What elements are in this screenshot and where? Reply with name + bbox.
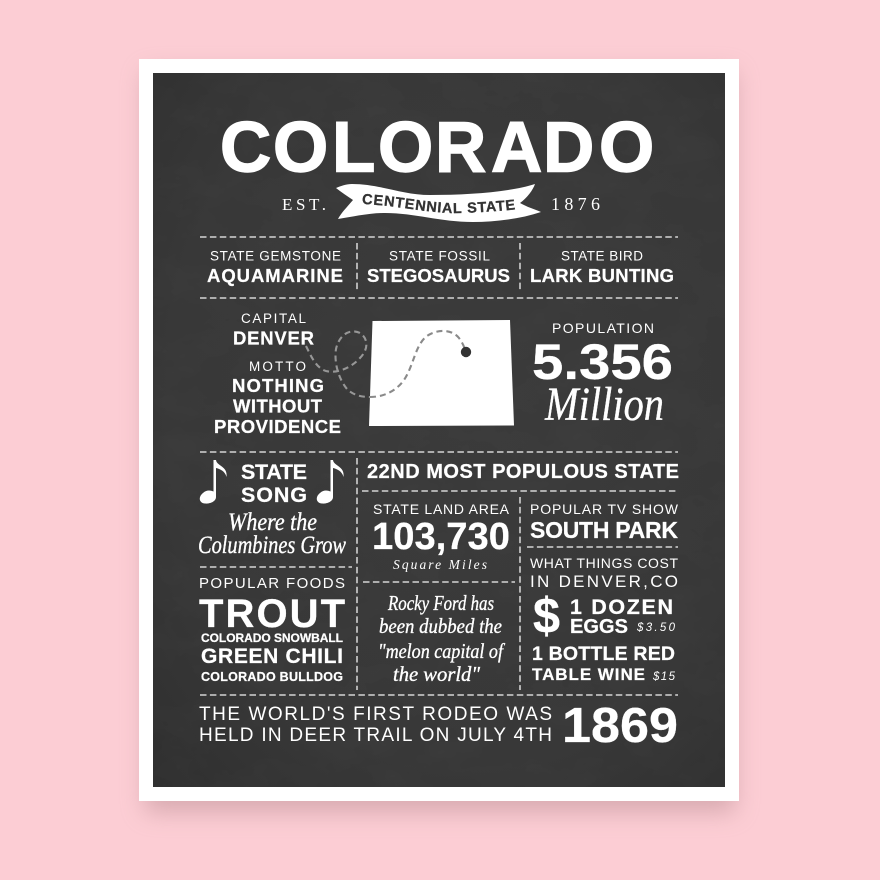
population <box>532 320 673 431</box>
wine item: TABLE WINE <box>532 665 645 684</box>
foods label: POPULAR FOODS <box>199 575 345 592</box>
title: COLORADO <box>220 108 654 188</box>
eggs item: $3.50 <box>636 622 676 634</box>
rodeo year: 1869 <box>562 699 678 753</box>
population label: POPULATION <box>552 320 654 336</box>
motto value: WITHOUT <box>233 396 323 416</box>
land area number: 103,730 <box>372 516 510 558</box>
song heading: STATE <box>241 460 307 484</box>
song title: Columbines Grow <box>198 532 346 559</box>
year: 1876 <box>551 194 600 214</box>
state facts row <box>207 248 674 286</box>
melon fact: been dubbed the <box>379 614 502 638</box>
state shape <box>369 320 514 426</box>
cost heading <box>530 555 678 591</box>
melon fact: the world" <box>393 662 480 686</box>
gemstone label: STATE GEMSTONE <box>210 248 341 264</box>
populous rank: 22ND MOST POPULOUS STATE <box>367 461 679 483</box>
poster white frame <box>139 59 739 801</box>
food: colorado snowball: COLORADO SNOWBALL <box>201 631 343 645</box>
melon fact: Rocky Ford has <box>387 591 494 615</box>
eggs item: EGGS <box>570 616 628 638</box>
wine item <box>532 643 676 684</box>
popular foods <box>199 575 345 684</box>
motto label: MOTTO <box>249 359 306 374</box>
chalkboard panel <box>153 73 725 787</box>
state song <box>198 460 346 559</box>
cost heading: WHAT THINGS COST <box>530 555 678 571</box>
dashed route inside state <box>370 331 465 397</box>
banner text: CENTENNIAL STATE <box>362 194 516 214</box>
rodeo text <box>199 704 552 746</box>
wine item: 1 BOTTLE RED <box>532 643 675 665</box>
bird label: STATE BIRD <box>561 248 643 264</box>
rodeo fact <box>199 699 678 753</box>
rodeo text: HELD IN DEER TRAIL ON JULY 4TH <box>199 725 552 746</box>
melon fact <box>378 591 506 686</box>
tv value: SOUTH PARK <box>530 517 678 543</box>
map: Colorado with dashed route <box>306 320 514 426</box>
destination dot <box>461 347 471 357</box>
capital value: DENVER <box>233 328 314 348</box>
song title <box>198 509 346 559</box>
icon: left music note <box>200 460 227 504</box>
rodeo text: THE WORLD'S FIRST RODEO WAS <box>199 704 552 725</box>
land area unit: Square Miles <box>393 557 487 572</box>
melon fact: "melon capital of <box>378 639 506 663</box>
motto value: PROVIDENCE <box>214 416 341 437</box>
eggs item: 1 DOZEN <box>570 595 673 619</box>
land area <box>372 501 510 572</box>
fossil label: STATE FOSSIL <box>389 248 490 264</box>
gemstone value: AQUAMARINE <box>207 265 343 286</box>
wine item: $15 <box>652 671 676 683</box>
song heading <box>241 460 307 507</box>
song title: Where the <box>228 509 317 536</box>
tv show <box>530 501 679 543</box>
population unit: Million <box>544 378 664 431</box>
ribbon banner <box>336 184 541 222</box>
capital label: CAPITAL <box>241 311 306 326</box>
food: colorado bulldog: COLORADO BULLDOG <box>201 670 343 684</box>
dashed route outside state <box>306 331 370 397</box>
song heading: SONG <box>241 483 307 507</box>
land area label: STATE LAND AREA <box>373 501 510 517</box>
divider lines <box>200 237 678 695</box>
capital and motto <box>214 311 341 437</box>
bird value: LARK BUNTING <box>530 265 674 286</box>
eggs item <box>570 595 676 638</box>
established line with banner <box>282 184 600 222</box>
icon: right music note <box>317 460 344 504</box>
icon: dollar sign: $ <box>533 588 560 644</box>
food: trout: TROUT <box>199 592 345 636</box>
cost heading: IN DENVER,CO <box>530 572 678 591</box>
cost of things in Denver <box>530 555 678 684</box>
tv label: POPULAR TV SHOW <box>530 501 679 517</box>
population number: 5.356 <box>532 334 673 390</box>
food: green chili: GREEN CHILI <box>201 645 343 668</box>
fossil value: STEGOSAURUS <box>367 265 510 286</box>
motto value: NOTHING <box>232 375 324 396</box>
motto value <box>214 375 341 437</box>
est label: EST. <box>282 195 326 214</box>
poster drop shadow <box>145 72 735 812</box>
